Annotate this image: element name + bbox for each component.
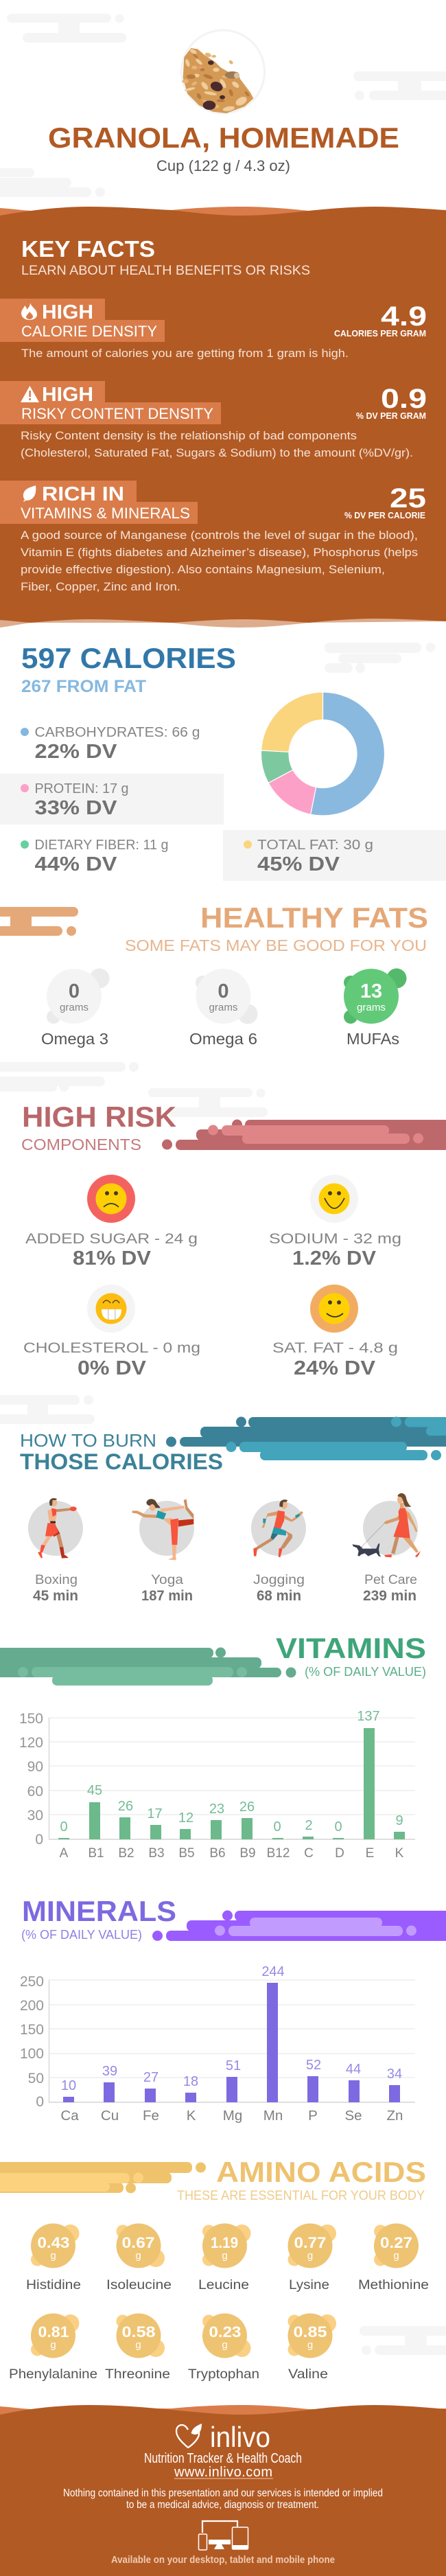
activity: boxing: Boxing [35,1573,78,1587]
bar chart: vitamins: 12 [178,1810,193,1826]
website link: www.inlivo.com [174,2465,272,2480]
bar chart: vitamins: C [304,1846,314,1861]
amino: leucine: 1.19 [211,2234,238,2251]
panel: amino acids [0,2156,446,2382]
fact: risky content density [0,381,427,459]
bar chart: vitamins: B6 [209,1846,226,1861]
item: added sugar [25,1175,198,1269]
bar chart: minerals: 39 [102,2064,117,2079]
panel: minerals [20,1895,446,2124]
panel: footer [0,2405,446,2576]
description: Risky Content density is the relationship of bad components [21,429,357,442]
icon: yoga pose [132,1499,193,1560]
bar chart: minerals: 200 [20,1998,44,2014]
stat: omega 3 [41,968,110,1048]
fact: rich in vitamins and minerals [0,481,426,593]
description [21,529,418,593]
subheading: (% OF DAILY VALUE) [21,1927,142,1942]
amino: histidine: g [50,2250,56,2262]
amino: methionine: 0.27 [380,2234,412,2251]
item: sodium: SODIUM - 32 mg [269,1231,401,1247]
bar chart: minerals: 150 [20,2022,44,2038]
item: sodium [269,1175,401,1269]
bar chart: minerals: Mn [263,2108,283,2124]
ribbon: teal [166,1417,446,1460]
legend: total fat: 45% DV [257,853,340,875]
activity: boxing: 45 min [33,1588,78,1604]
activity: pet care [352,1493,421,1604]
bar chart: minerals: Mg [223,2108,242,2124]
amino: valine: Valine [288,2367,328,2382]
bar chart: minerals: Ca [60,2108,79,2124]
bar chart: vitamins: 137 [357,1709,380,1724]
item: saturated fat: SAT. FAT - 4.8 g [272,1340,398,1356]
bar chart: vitamins: D [335,1846,344,1861]
bar chart: vitamins: 60 [27,1784,43,1799]
subheading: SOME FATS MAY BE GOOD FOR YOU [125,936,427,954]
legend: carbohydrates: CARBOHYDRATES: 66 g [34,725,200,740]
label: risky content density: RISKY CONTENT DENSITY [21,405,213,422]
amino: threonine: Threonine [105,2367,170,2382]
subheading: from fat: 267 FROM FAT [21,677,146,696]
subheading: LEARN ABOUT HEALTH BENEFITS OR RISKS [21,264,310,278]
unit: dv per gram: % DV PER GRAM [356,411,426,421]
bar chart: minerals: 34 [387,2067,402,2082]
bar chart: vitamins: 120 [19,1735,43,1751]
amino: tryptophan: Tryptophan [188,2367,259,2382]
logo: heart and leaf [176,2424,202,2448]
bar chart: vitamins: 17 [147,1806,163,1821]
icon: jogger [253,1499,303,1557]
bar chart: vitamins: 90 [27,1759,43,1775]
availability note: Available on your desktop, tablet and mobile phone [111,2554,335,2566]
description [21,429,413,459]
label: rich in: RICH IN [42,483,124,505]
tagline: Nutrition Tracker & Health Coach [144,2451,302,2466]
bar chart: vitamins: 0 [35,1832,43,1848]
legend: total fat: TOTAL FAT: 30 g [257,838,373,853]
heading: healthy fats: HEALTHY FATS [200,901,428,934]
bar chart: minerals: Cu [101,2108,119,2124]
amino: methionine [358,2223,429,2292]
stat: mufas: MUFAs [347,1030,399,1048]
heading: high risk: HIGH RISK [22,1101,176,1133]
activity: jogging: 68 min [257,1588,301,1604]
item: added sugar: 81% DV [73,1247,152,1269]
disclaimer: Nothing contained in this presentation and our services is intended or implied [63,2487,383,2499]
amino: valine: 0.85 [294,2323,327,2341]
legend: dietary fiber: 44% DV [34,853,117,875]
label: high: HIGH [42,301,93,323]
icon: boxer [38,1498,77,1559]
ribbon: purple [152,1910,446,1941]
bar chart: vitamins: B3 [148,1846,165,1861]
amino: leucine: Leucine [198,2277,249,2292]
amino: lysine: 0.77 [294,2234,327,2251]
amino: phenylalanine: 0.81 [38,2323,69,2341]
legend: carbohydrates [21,725,200,763]
unit: calories per gram: CALORIES PER GRAM [334,328,426,338]
amino: methionine: Methionine [358,2277,429,2292]
amino: phenylalanine [9,2314,97,2382]
bar chart: minerals: 244 [261,1964,285,1979]
panel: healthy fats [0,901,428,1048]
description: Vitamin E (fights diabetes and Alzheimer’s disease), Phosphorus (helps [21,546,418,559]
amino: threonine [105,2314,170,2382]
item: cholesterol: 0% DV [78,1357,147,1379]
bar chart: vitamins: B12 [267,1846,290,1861]
bar chart: minerals: 100 [20,2046,44,2062]
bar chart: vitamins: A [60,1846,69,1861]
amino: isoleucine: Isoleucine [106,2277,172,2292]
bar chart: minerals: Fe [143,2108,159,2124]
bar chart: vitamins: 9 [395,1813,403,1828]
legend: protein: 33% DV [34,797,117,819]
ribbon: yellow [0,2162,206,2193]
bar chart: minerals: 44 [346,2062,361,2077]
amino: valine: g [307,2339,313,2351]
stat: omega 6: Omega 6 [189,1030,257,1048]
label: high: HIGH [42,384,93,406]
heading: those calories: THOSE CALORIES [20,1449,223,1474]
amino: threonine: g [135,2339,141,2351]
legend: carbohydrates: 22% DV [34,741,117,763]
amino: histidine: 0.43 [37,2234,70,2251]
amino: valine [288,2314,336,2382]
subheading: components: COMPONENTS [21,1136,141,1153]
disclaimer [63,2487,383,2511]
description: The amount of calories you are getting from 1 gram is high. [21,347,349,360]
bar chart: minerals: 10 [61,2078,76,2093]
amino: leucine [198,2223,251,2292]
legend: protein [21,781,129,819]
subheading: THESE ARE ESSENTIAL FOR YOUR BODY [177,2189,425,2203]
amino: isoleucine: g [135,2250,141,2262]
disclaimer: to be a medical advice, diagnosis or treatment. [126,2499,319,2511]
legend: total fat [244,838,373,875]
value: 0.9: 0.9 [381,384,427,414]
stat: omega 6: grams [209,1002,237,1013]
amino: tryptophan: 0.23 [209,2323,242,2341]
subheading: (% OF DAILY VALUE) [305,1664,426,1679]
bar chart: vitamins: K [395,1846,404,1861]
bar chart: vitamins: B2 [118,1846,134,1861]
bar chart: vitamins: 26 [118,1799,133,1814]
item: added sugar: ADDED SUGAR - 24 g [25,1231,198,1247]
amino: methionine: g [393,2250,399,2262]
item: saturated fat: 24% DV [294,1357,376,1379]
label: vitamins and minerals: VITAMINS & MINERALS [21,505,190,522]
description: (Cholesterol, Saturated Fat, Sugars & Sodium) to the amount (%DV/gr). [21,446,413,459]
item: sodium: 1.2% DV [292,1247,377,1269]
bar chart: minerals: 51 [226,2058,241,2073]
icon: woman walking dog [352,1493,421,1557]
activity: yoga: Yoga [151,1573,183,1587]
activity: boxing [28,1498,83,1604]
activity: pet care: 239 min [363,1588,416,1604]
heading: minerals: MINERALS [22,1895,176,1927]
bar chart: vitamins: 23 [209,1802,224,1817]
icon: granola photo in circle [181,30,265,113]
amino: tryptophan: g [222,2339,228,2351]
bar chart: vitamins: 30 [27,1808,43,1824]
activity: yoga [132,1499,194,1604]
description: provide effective digestion). Also contains Magnesium, Selenium, [21,563,385,576]
item: cholesterol: CHOLESTEROL - 0 mg [23,1340,200,1356]
bar chart: vitamins: 0 [334,1819,342,1835]
title: GRANOLA, HOMEMADE [48,122,399,154]
stat: omega 3: Omega 3 [41,1030,108,1048]
label: calorie density: CALORIE DENSITY [21,323,157,340]
amino: lysine: g [307,2250,313,2262]
heading: 597 calories: 597 CALORIES [21,642,236,674]
bar chart: minerals: P [308,2108,318,2124]
description: A good source of Manganese (controls the level of sugar in the blood), [21,529,418,542]
bar chart: vitamins: B5 [178,1846,195,1861]
bar chart: minerals: Se [344,2108,362,2124]
amino: isoleucine [106,2223,172,2292]
amino: histidine: Histidine [26,2277,81,2292]
bar chart: vitamins: 0 [273,1819,281,1835]
amino: phenylalanine: Phenylalanine [9,2367,97,2382]
heading: vitamins: VITAMINS [276,1632,426,1664]
panel: high risk components [21,1101,446,1379]
bar chart: vitamins: B1 [88,1846,104,1861]
item: cholesterol [23,1285,200,1379]
heading: amino acids: AMINO ACIDS [216,2156,426,2188]
activity: pet care: Pet Care [364,1573,417,1587]
value: 25: 25 [390,483,426,514]
activity: jogging: Jogging [253,1573,305,1587]
amino: phenylalanine: g [50,2339,56,2351]
panel: key facts [0,207,446,628]
activity: jogging [251,1499,306,1604]
activity: yoga: 187 min [141,1588,193,1604]
bar chart: vitamins: 2 [305,1818,313,1833]
heading: key facts: KEY FACTS [21,236,155,262]
stat: mufas: 13 [360,980,382,1002]
donut chart [261,692,385,816]
heading: how to burn: HOW TO BURN [20,1430,156,1451]
amino: histidine [26,2223,81,2292]
bar chart: minerals: 0 [36,2094,44,2110]
bar chart: minerals: 50 [28,2071,44,2086]
bar chart: minerals: Zn [387,2108,403,2124]
value: 4.9: 4.9 [381,301,427,332]
stat: omega 6: 0 [218,980,229,1002]
panel: how to burn calories [20,1417,446,1604]
bar chart: vitamins: 45 [87,1783,102,1798]
bar chart: vitamins: B9 [239,1846,256,1861]
bar chart: minerals: 250 [20,1974,44,1990]
stat: omega 3: 0 [69,980,80,1002]
amino: lysine: Lysine [289,2277,329,2292]
bar chart: vitamins [19,1709,415,1861]
icon: warning triangle [21,386,39,402]
ribbon: green [0,1648,296,1686]
stat: omega 6 [189,969,258,1048]
serving subtitle: Cup (122 g / 4.3 oz) [156,157,290,174]
amino: tryptophan [188,2314,259,2382]
bar chart: vitamins: E [366,1846,374,1861]
description: Fiber, Copper, Zinc and Iron. [21,580,180,593]
bar chart: vitamins: 150 [19,1711,43,1727]
unit: dv per calorie: % DV PER CALORIE [344,510,425,520]
logo: inlivo wordmark: inlivo [210,2421,270,2453]
bar chart: minerals: 27 [143,2070,159,2085]
amino: lysine [288,2223,336,2292]
panel: vitamins [0,1632,426,1861]
amino: isoleucine: 0.67 [122,2234,155,2251]
icon: leaf [23,485,36,502]
amino: threonine: 0.58 [122,2323,155,2341]
legend: protein: PROTEIN: 17 g [34,781,129,796]
stat: mufas [344,968,406,1048]
bar chart: minerals: K [187,2108,196,2124]
bar chart: minerals [20,1964,415,2124]
legend: dietary fiber: DIETARY FIBER: 11 g [34,838,169,853]
icon: devices [199,2521,248,2550]
stat: mufas: grams [357,1002,386,1013]
legend: dietary fiber [21,838,169,875]
panel: calories [0,642,446,881]
icon: flame [21,303,37,320]
ribbon: red [162,1119,446,1150]
fact: calorie density [0,299,427,360]
item: saturated fat [272,1285,398,1379]
bar chart: vitamins: 26 [239,1799,255,1815]
stat: omega 3: grams [60,1002,89,1013]
bar chart: vitamins: 0 [60,1819,68,1835]
bar chart: minerals: 52 [306,2058,321,2073]
bar chart: minerals: 18 [183,2074,198,2089]
amino: leucine: g [222,2250,228,2262]
